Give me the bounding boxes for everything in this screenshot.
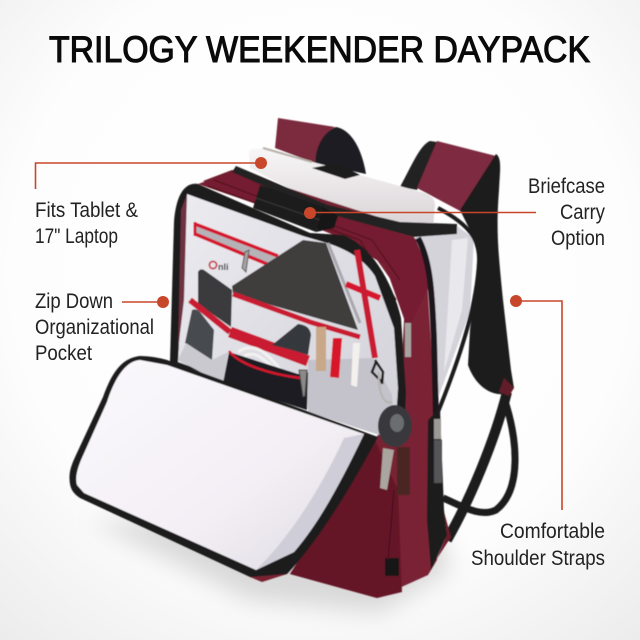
upper zip pocket [195,222,278,272]
laptop tab [312,163,360,179]
key fob and key [378,372,412,490]
callout: fits tablet and laptop [35,157,267,248]
side zipper and tag [434,419,442,483]
outer zipper [438,208,479,412]
white cable [238,348,280,369]
pens [316,327,360,387]
compartment black band [418,238,436,420]
title: TRILOGY WEEKENDER DAYPACK [49,29,590,70]
callout: zip down organizational pocket: Pocket [35,342,92,365]
top carry handle [253,185,338,232]
upper zip band [232,166,457,237]
callout: briefcase carry option: Option [551,227,605,250]
callout: zip down organizational pocket [35,290,169,365]
maroon lower flap edge [250,574,287,582]
callout: zip down organizational pocket: Organizational [35,316,154,339]
side pocket detail [385,490,399,576]
callout: comfortable shoulder straps: Comfortable [500,520,605,543]
lower side maroon edge [436,512,451,560]
phone [198,269,232,327]
callout: fits tablet and laptop: 17" Laptop [35,225,118,248]
red pocket edges [190,294,360,361]
laptop [249,148,435,228]
callout: fits tablet and laptop: Fits Tablet & [35,199,138,222]
backpack photo illustration [69,118,515,598]
callout: briefcase carry option [304,175,605,250]
pen pocket [308,358,395,440]
main body maroon [203,170,437,598]
flap shading [256,434,364,570]
power bank [185,309,214,360]
callout: briefcase carry option: Carry [560,201,605,224]
ground shadow [90,520,450,612]
shoulder straps [275,118,515,540]
lower side black strip [427,408,447,570]
top gusset [198,172,430,330]
callout: zip down organizational pocket: Zip Down [35,290,113,313]
callout: briefcase carry option: Briefcase [528,175,605,198]
gadget [272,324,311,355]
inner maroon trim [178,194,187,350]
callout: comfortable shoulder straps: Shoulder Straps [471,547,605,570]
brand logo: nli [218,262,228,272]
flap lining [76,360,364,570]
zipper pull side [405,323,411,357]
lower black pocket [223,351,308,410]
stylus and right strap [328,243,380,358]
flap outer zipper [69,356,378,580]
flap maroon gusset [290,440,402,598]
callout: comfortable shoulder straps [471,295,605,570]
right compartment [414,226,474,398]
carabiner [372,360,383,384]
interior panel frame [170,184,406,440]
leather strap tab [397,447,410,495]
tablet in pocket [232,240,358,330]
left grey pouch [178,343,228,384]
interior panel [178,194,398,440]
brand logo [209,261,228,272]
